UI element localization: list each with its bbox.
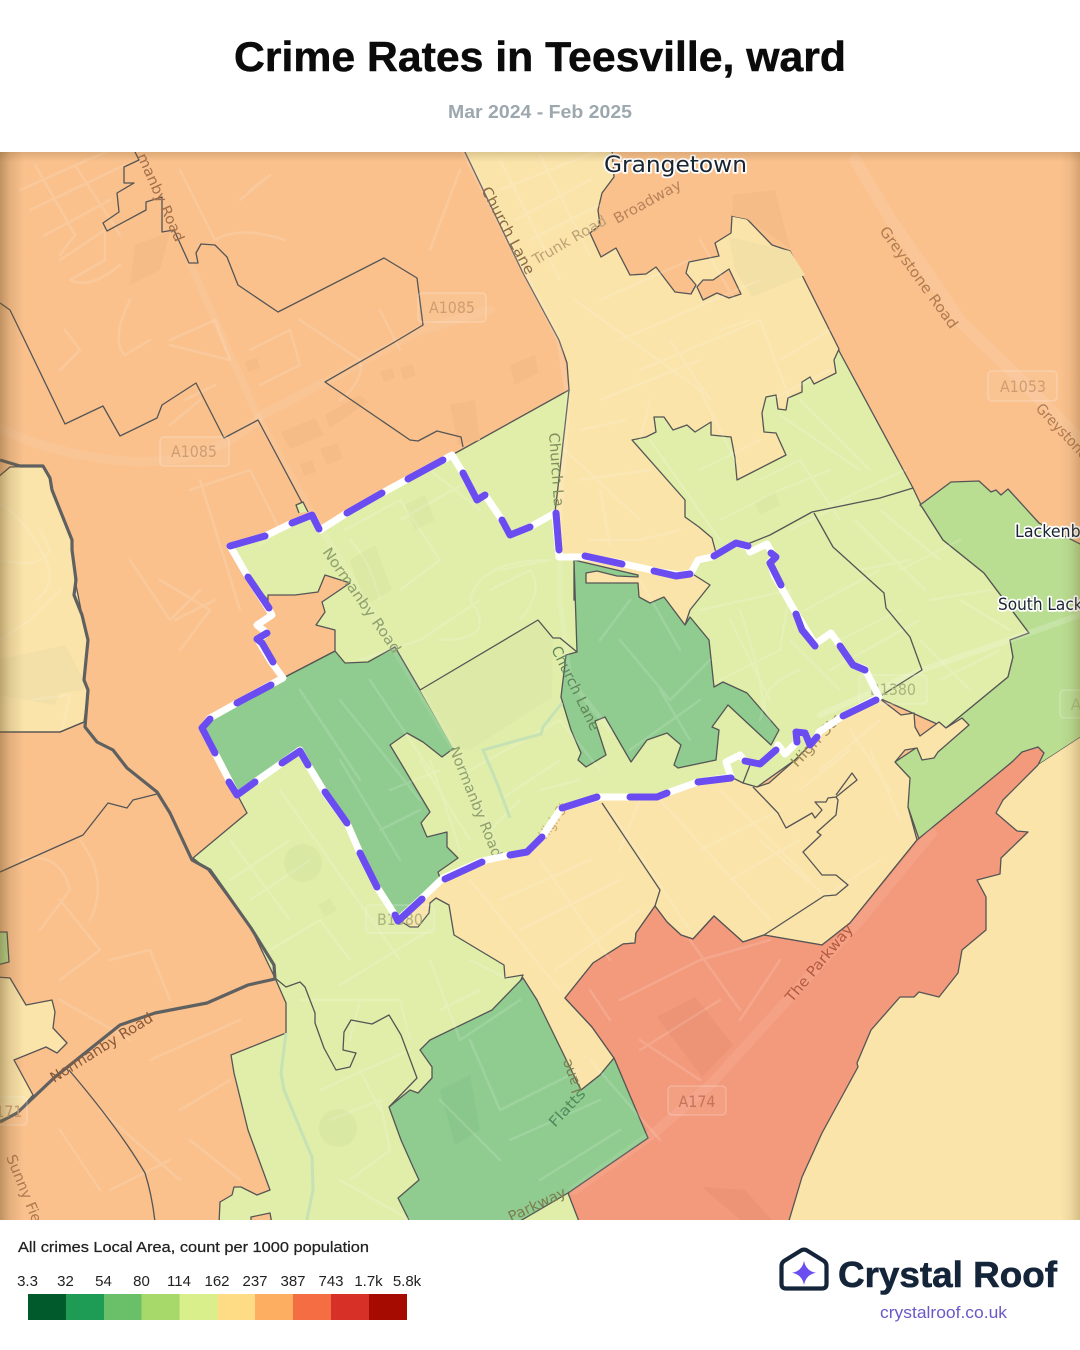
area: central ward green xyxy=(561,560,779,768)
label: Flatts Lane: Flatts xyxy=(546,1086,589,1131)
label: Church Lane mid: Church La xyxy=(545,432,566,507)
legend scale labels: 3.3 xyxy=(17,1273,38,1290)
label: Normanby Road south: Normanby Road xyxy=(445,745,504,860)
legend scale labels: 387 xyxy=(280,1273,306,1290)
shield A1085 north: A1085 xyxy=(429,298,475,317)
label: Normanby Road west: Normanby Road xyxy=(48,1010,156,1086)
area: south yellow xyxy=(399,698,969,1090)
east inner boundaries xyxy=(814,513,922,697)
legend scale labels: 1.7k xyxy=(354,1273,383,1290)
label: Lane: Lane xyxy=(559,1057,586,1095)
road labels xyxy=(2,151,1080,1226)
shield east edge xyxy=(1060,690,1080,718)
shield A1053: A1053 xyxy=(1000,377,1046,396)
small green corner xyxy=(296,502,308,513)
legend scale labels: 5.8k xyxy=(393,1273,422,1290)
legend scale labels: 54 xyxy=(95,1273,112,1290)
shield A1085 west: A1085 xyxy=(171,442,217,461)
area: south green xyxy=(389,978,648,1224)
thick dark road boundary xyxy=(0,460,275,1122)
area: east mid-light green xyxy=(895,481,1080,842)
legend colour bar xyxy=(28,1294,407,1320)
website link: crystalroof.co.uk xyxy=(880,1304,1008,1322)
shield B1380 south: B1380 xyxy=(377,910,423,929)
buildings and parks xyxy=(0,190,805,1224)
legend scale labels: 162 xyxy=(204,1273,230,1290)
ward outline purple dashes xyxy=(202,460,876,921)
Crystal Roof logo xyxy=(779,1248,1058,1322)
street network xyxy=(0,150,1080,1220)
shield A1053 xyxy=(988,371,1057,401)
label: High Street east: High Str xyxy=(788,712,844,771)
area: small orange at south xyxy=(251,1213,272,1224)
south yellow inner boundary xyxy=(602,803,660,906)
shield A174 xyxy=(668,1086,726,1115)
shield west edge xyxy=(0,1097,27,1125)
shield A1085 west xyxy=(160,437,229,466)
shield A174: A174 xyxy=(678,1092,716,1111)
ward outline white xyxy=(202,455,879,920)
road shields xyxy=(0,293,1080,1125)
header: title and date range xyxy=(234,33,846,122)
legend title: All crimes Local Area, count per 1000 population xyxy=(18,1239,369,1256)
label: The Parkway: The Parkway xyxy=(782,921,857,1006)
label: Trunk Road: Trunk Road xyxy=(529,213,610,269)
area: south-east yellow xyxy=(780,735,1080,1224)
title: Crime Rates in Teesville, ward xyxy=(234,33,846,80)
area: west ward green xyxy=(202,647,458,920)
rivers xyxy=(281,703,562,1224)
legend scale labels xyxy=(17,1273,422,1290)
area: west yellow xyxy=(0,466,88,732)
label: Church Lane north: Church Lane xyxy=(477,184,537,278)
west district boundary xyxy=(0,303,306,510)
area: Grangetown orange pocket xyxy=(697,269,741,300)
date range subtitle: Mar 2024 - Feb 2025 xyxy=(448,102,632,122)
legend scale labels: 32 xyxy=(57,1273,74,1290)
area: small green at west edge xyxy=(0,932,9,965)
label: Church Lane south: Church Lane xyxy=(547,644,602,734)
label: Broadway: Broadway xyxy=(611,177,685,227)
north-west district boundary xyxy=(103,150,463,447)
label: Normanby Road ward: Normanby Road xyxy=(319,545,404,657)
place: Grangetown: Grangetown xyxy=(604,153,747,178)
boundary lines xyxy=(0,150,922,1222)
area: large light green xyxy=(193,349,1029,1224)
ward boundary xyxy=(202,455,879,921)
legend scale labels: 114 xyxy=(167,1273,191,1290)
legend scale labels: 743 xyxy=(318,1273,344,1290)
legend scale labels: 237 xyxy=(242,1273,268,1290)
label: High Street west: High St xyxy=(536,800,572,842)
shield B1380 south xyxy=(366,905,434,933)
place names xyxy=(604,153,1080,614)
label: Greystone Road: Greystone Road xyxy=(876,224,960,332)
label: Normanby Road north: manby Road xyxy=(133,152,187,244)
area: north yellow with Church Lane strip xyxy=(464,150,839,625)
choropleth map xyxy=(0,152,1080,1220)
central ward inner boundary xyxy=(420,620,577,690)
map base: orange area xyxy=(0,152,1080,1220)
area: south-west yellow xyxy=(0,977,67,1122)
icon: house with star xyxy=(782,1250,826,1288)
area polygons xyxy=(0,150,1080,1224)
shield B1380 east xyxy=(859,675,927,704)
legend panel xyxy=(17,1239,422,1320)
orange area inner lines xyxy=(0,794,157,872)
area: orange notch in ward xyxy=(257,575,350,678)
shield A1085 north xyxy=(418,293,486,322)
logo wordmark: Crystal Roof xyxy=(838,1254,1058,1295)
shield B1380 east: B1380 xyxy=(870,680,916,699)
area: high crime red xyxy=(565,747,1044,1224)
legend scale labels: 80 xyxy=(133,1273,150,1290)
